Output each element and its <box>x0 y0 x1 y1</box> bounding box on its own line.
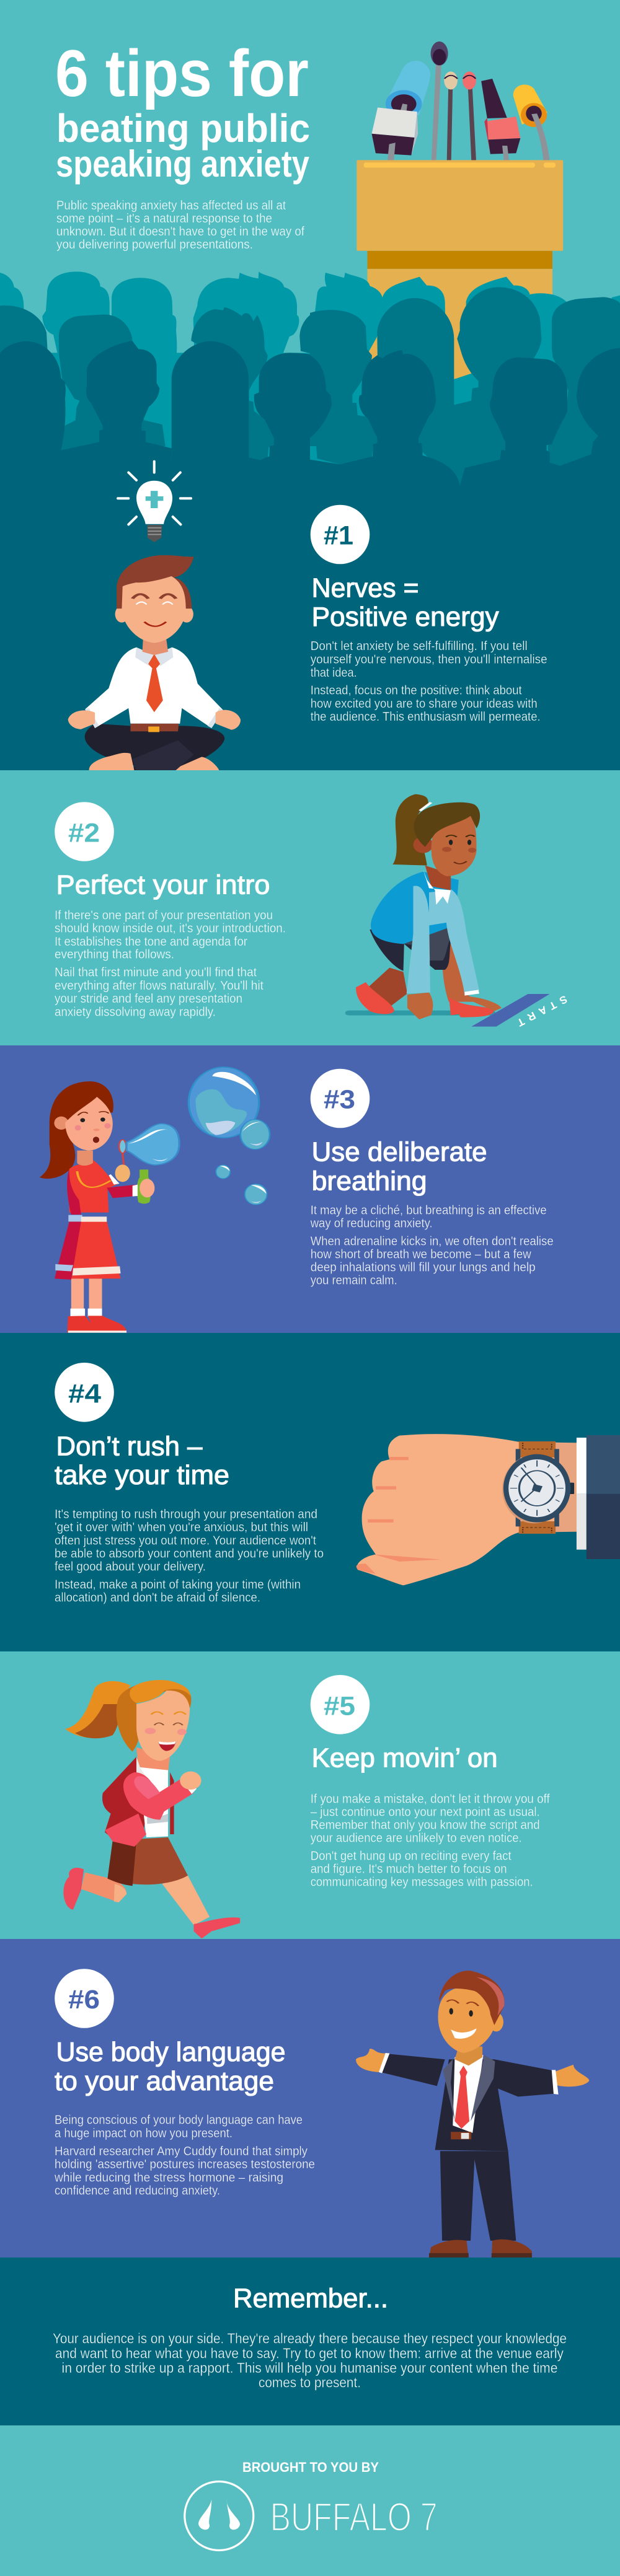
text: tip 2: It establishes the tone and agenda for <box>55 935 247 949</box>
belt <box>451 2132 471 2139</box>
heading: tip 1: Positive energy <box>312 602 499 632</box>
text: tip 5: communicating key messages with passion. <box>311 1875 533 1889</box>
neck and face <box>425 866 451 890</box>
illustration: meditating man <box>68 555 241 772</box>
text: remember: and want to hear what you have to say. Try to get to know them: arrive at the venue early <box>55 2345 564 2362</box>
shirt <box>453 2055 483 2133</box>
heading: tip 3 <box>312 1136 487 1197</box>
legs <box>71 1278 84 1309</box>
jacket sleeve <box>587 1435 620 1494</box>
skirt <box>107 1837 188 1884</box>
shoes <box>429 2240 469 2257</box>
microphone: tall dark <box>431 42 448 160</box>
tie <box>146 654 163 712</box>
audience back row <box>0 271 620 514</box>
tie <box>454 2066 469 2129</box>
text: tip 3 <box>310 1203 554 1288</box>
heading: tip 2: Perfect your intro <box>56 870 270 900</box>
medium bubble <box>241 1120 270 1150</box>
belt <box>130 724 179 731</box>
illustration: running woman <box>63 1680 240 1938</box>
text: tip 4: often just stress you out more. Your audience won't <box>55 1534 316 1547</box>
text: tip 5: Remember that only you know the script and <box>311 1819 540 1832</box>
heading: tip 5: Keep movin’ on <box>312 1743 498 1774</box>
audience front row <box>0 341 620 514</box>
text: tip 4 <box>55 1508 324 1604</box>
illustration: woman at start line <box>345 794 550 1027</box>
head <box>77 1151 93 1166</box>
text: tip 5: Don't get hung up on reciting every fact <box>311 1849 512 1863</box>
text: tip 4: be able to absorb your content and you're unlikely to <box>55 1547 324 1560</box>
badge: tip 4 <box>55 1363 114 1422</box>
text: tip 5 <box>311 1792 550 1889</box>
heading: remember: Remember... <box>233 2283 388 2313</box>
text: tip 6: Harvard researcher Amy Cuddy found that simply <box>55 2145 308 2158</box>
text: tip 1: Instead, focus on the positive: think about <box>311 684 522 698</box>
podium band <box>368 251 552 269</box>
intro text: unknown. But it doesn't have to get in the way of <box>56 225 304 239</box>
text: tip 2 <box>55 908 286 1019</box>
title <box>55 36 310 185</box>
text: tip 4: allocation) and don't be afraid of silence. <box>55 1591 260 1604</box>
blouse <box>371 872 459 944</box>
illustration: podium with microphones <box>356 42 563 389</box>
heading: tip 6 <box>55 2037 285 2096</box>
microphone: small beige <box>444 71 458 160</box>
bubble on wand <box>126 1123 179 1165</box>
text: remember: comes to present. <box>259 2374 361 2390</box>
text: tip 3: you remain calm. <box>311 1274 397 1288</box>
microphone: small red <box>463 71 476 160</box>
text: tip 6: while reducing the stress hormone – raising <box>54 2171 283 2185</box>
badge: tip 6 <box>55 1969 114 2028</box>
shirt <box>85 648 223 728</box>
back leg and shoe <box>81 1873 126 1902</box>
heading: tip 4: take your time <box>55 1460 229 1490</box>
title: speaking anxiety <box>56 143 310 185</box>
heading: tip 1: Nerves = <box>312 573 419 604</box>
text: remember: in order to strike up a rapport. This will help you humanise your content when the time <box>62 2360 558 2376</box>
illustration: hand with wristwatch <box>356 1434 620 1585</box>
text: tip 3: When adrenaline kicks in, we often don't realise <box>311 1234 554 1248</box>
text: tip 6: Being conscious of your body language can have <box>55 2113 303 2127</box>
text: tip 5: and figure. It's much better to focus on <box>311 1863 507 1876</box>
text: tip 6 <box>54 2113 315 2197</box>
badge: tip 1: #1 <box>324 521 353 550</box>
text: tip 5: your audience are unlikely to even notice. <box>311 1832 522 1845</box>
bulb rays <box>118 462 191 524</box>
text: tip 5: – just continue onto your next point as usual. <box>311 1806 540 1819</box>
big bubble <box>188 1067 259 1138</box>
shoes <box>67 1316 95 1333</box>
text: tip 6: confidence and reducing anxiety. <box>55 2184 220 2197</box>
heading: tip 1 <box>312 573 499 632</box>
text: tip 2: everything that follows. <box>55 948 174 962</box>
badge: tip 3 <box>311 1069 370 1128</box>
text: tip 2: Nail that first minute and you'll find that <box>55 966 257 980</box>
text: tip 1: how excited you are to share your ideas with <box>311 697 538 711</box>
footer label: BROUGHT TO YOU BY <box>242 2460 379 2475</box>
microphone: white box <box>372 108 418 160</box>
neck <box>136 1747 170 1772</box>
hands <box>68 710 95 729</box>
text: tip 2: anxiety dissolving away rapidly. <box>55 1005 216 1019</box>
text: tip 1: Don't let anxiety be self-fulfilling. If you tell <box>311 640 528 653</box>
legs <box>366 968 407 1010</box>
badge: tip 2: #2 <box>68 819 100 848</box>
small bubble <box>216 1165 230 1179</box>
badge: tip 4: #4 <box>68 1379 101 1409</box>
watch strap <box>519 1441 556 1534</box>
ground shadow <box>345 1011 495 1016</box>
text: tip 6: holding 'assertive' postures increases testosterone <box>55 2158 315 2171</box>
logo: buffalo icon <box>185 2481 254 2551</box>
watch case <box>502 1455 565 1523</box>
text: remember: Your audience is on your side. They're already there because they respect your knowledge <box>53 2331 567 2347</box>
intro text <box>56 199 304 252</box>
panel: tip 3 background <box>0 1045 620 1333</box>
heading: tip 4 <box>55 1431 229 1490</box>
badge: tip 6: #6 <box>68 1985 100 2015</box>
bubble wand <box>119 1140 126 1153</box>
lapels <box>443 2059 454 2121</box>
shoes <box>356 982 394 1014</box>
text: tip 2: your stride and feel any presentation <box>55 992 242 1006</box>
text: tip 2: should know inside out, it's your introduction. <box>55 922 286 936</box>
trousers <box>440 2151 516 2241</box>
shirt cuff <box>577 1438 587 1494</box>
badge: tip 3: #3 <box>324 1085 355 1115</box>
text: tip 2: everything after flows naturally. You'll hit <box>55 979 264 993</box>
collar <box>423 869 451 905</box>
heading: tip 6: Use body language <box>56 2037 285 2067</box>
intro text: Public speaking anxiety has affected us all at <box>56 199 286 213</box>
title: beating public <box>56 106 310 151</box>
text: tip 2: If there's one part of your presentation you <box>55 908 273 922</box>
knuckle creases <box>356 1457 441 1574</box>
badge: tip 1 <box>311 505 370 564</box>
text: tip 4: 'get it over with' when you're anxious, but this will <box>55 1521 308 1534</box>
jacket <box>435 2059 508 2151</box>
hand <box>357 1434 577 1585</box>
badge: tip 5: #5 <box>324 1691 355 1721</box>
text: tip 6: a huge impact on how you present. <box>55 2127 232 2140</box>
icon: light bulb <box>118 462 191 542</box>
panel: tip 1 background <box>0 485 620 770</box>
panel: tip 2 background <box>0 770 620 1045</box>
panel: tip 6 background <box>0 1939 620 2258</box>
text: tip 4: Instead, make a point of taking your time (within <box>55 1578 301 1591</box>
text: tip 3: deep inhalations will fill your lungs and help <box>311 1261 536 1275</box>
microphone: blue <box>386 61 430 118</box>
text: tip 4: feel good about your delivery. <box>55 1560 206 1573</box>
panel: remember <box>0 2257 620 2425</box>
text: remember <box>53 2331 567 2390</box>
small bubble <box>245 1184 267 1205</box>
jacket <box>102 1757 146 1840</box>
logo: wordmark: BUFFALO 7 <box>270 2494 438 2539</box>
microphone: yellow <box>513 85 550 160</box>
start label: START <box>515 993 569 1029</box>
badge: tip 2 <box>55 802 114 861</box>
heading: tip 3: Use deliberate <box>312 1136 487 1167</box>
illustration: girl blowing bubbles <box>40 1067 270 1333</box>
intro text: you delivering powerful presentations. <box>56 238 253 252</box>
head <box>454 2047 482 2066</box>
podium highlight <box>364 162 556 167</box>
bottle and hand <box>137 1169 151 1203</box>
text: tip 1: the audience. This enthusiasm will permeate. <box>311 710 541 724</box>
illustration: businessman with open arms <box>356 1971 589 2257</box>
heading: tip 3: breathing <box>312 1166 427 1197</box>
skirt <box>370 923 454 971</box>
ponytail <box>65 1681 130 1738</box>
text: tip 1: that idea. <box>311 666 357 680</box>
hands <box>356 2049 389 2072</box>
arms <box>381 2054 445 2086</box>
head <box>120 1717 135 1735</box>
hands <box>407 993 433 1019</box>
head <box>143 638 168 655</box>
text: tip 5: If you make a mistake, don't let it throw you off <box>311 1792 550 1806</box>
title: 6 tips for <box>55 36 309 110</box>
text: tip 4: It's tempting to rush through your presentation and <box>55 1508 317 1521</box>
text: tip 3: how short of breath we become – but a few <box>311 1248 531 1262</box>
text: tip 3: It may be a cliché, but breathing is an effective <box>311 1203 547 1217</box>
text: tip 3: way of reducing anxiety. <box>310 1217 433 1231</box>
hair <box>40 1081 113 1179</box>
front leg and shoe <box>162 1876 210 1925</box>
text: tip 1 <box>311 640 547 724</box>
legs <box>85 724 224 771</box>
intro text: some point – it's a natural response to the <box>56 212 272 226</box>
dress <box>69 1160 118 1213</box>
panel: tip 4 background <box>0 1333 620 1651</box>
start line <box>471 994 550 1027</box>
ponytail <box>392 794 429 866</box>
podium lower body <box>368 269 552 389</box>
microphone: dark handle red box <box>481 79 520 160</box>
badge: tip 5 <box>311 1675 370 1734</box>
text: tip 1: yourself you're nervous, then you'll internalise <box>311 653 547 667</box>
panel: hero background <box>0 0 620 496</box>
illustration: audience silhouettes <box>0 271 620 514</box>
audience middle row <box>0 287 620 490</box>
panel: tip 5 background <box>0 1651 620 1939</box>
panel: footer <box>0 2425 620 2576</box>
heading: tip 6: to your advantage <box>55 2066 274 2096</box>
podium top <box>356 160 563 251</box>
arm <box>123 1772 194 1820</box>
heading: tip 4: Don’t rush – <box>56 1431 203 1461</box>
